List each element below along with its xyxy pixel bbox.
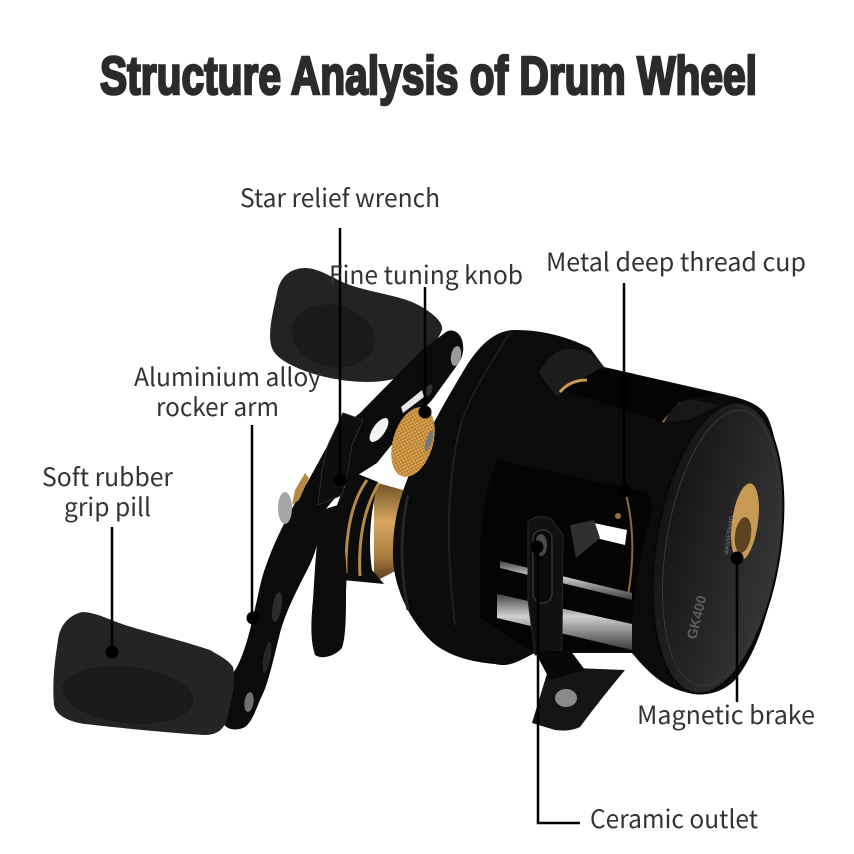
centre pivot bolt	[278, 473, 309, 524]
spool collar	[326, 472, 405, 584]
reel body	[393, 330, 780, 694]
callout: fine tuning knob	[329, 256, 523, 418]
magnetic brake dial: WASSERMAG	[724, 515, 736, 555]
callout: ceramic outlet: Ceramic outlet	[590, 800, 759, 836]
callout: aluminium alloy rocker arm	[134, 358, 321, 624]
callout: aluminium alloy rocker arm: rocker arm	[156, 388, 279, 424]
soft rubber grip	[53, 612, 234, 735]
callout: soft rubber grip pill: grip pill	[64, 488, 151, 524]
callout: soft rubber grip pill: Soft rubber	[42, 458, 173, 494]
upper handle grip	[270, 268, 442, 382]
fishing reel	[53, 268, 802, 735]
callout: aluminium alloy rocker arm: Aluminium alloy	[134, 358, 321, 394]
rocker arm	[220, 331, 463, 729]
callout: fine tuning knob: Fine tuning knob	[329, 256, 523, 292]
callout: magnetic brake: Magnetic brake	[637, 696, 815, 732]
model name on cap: GK400	[683, 594, 710, 641]
top window of frame	[539, 349, 718, 422]
mounting foot	[532, 650, 625, 731]
callout: metal deep thread cup	[546, 243, 806, 498]
fine tuning knob	[383, 402, 443, 482]
star relief wrench	[311, 413, 363, 657]
callout: ceramic outlet	[530, 540, 759, 836]
callout: star relief wrench: Star relief wrench	[240, 179, 440, 215]
ceramic line guide	[528, 516, 563, 655]
callout: soft rubber grip pill	[42, 458, 173, 658]
thin guide rod	[500, 561, 632, 600]
callout: star relief wrench	[240, 179, 440, 486]
frame window	[480, 460, 652, 650]
callout: metal deep thread cup: Metal deep thread cup	[546, 243, 806, 279]
magnetic brake dial	[724, 482, 763, 562]
end cap	[634, 393, 802, 703]
thick guide rod	[497, 594, 632, 650]
callout: magnetic brake	[637, 552, 815, 732]
